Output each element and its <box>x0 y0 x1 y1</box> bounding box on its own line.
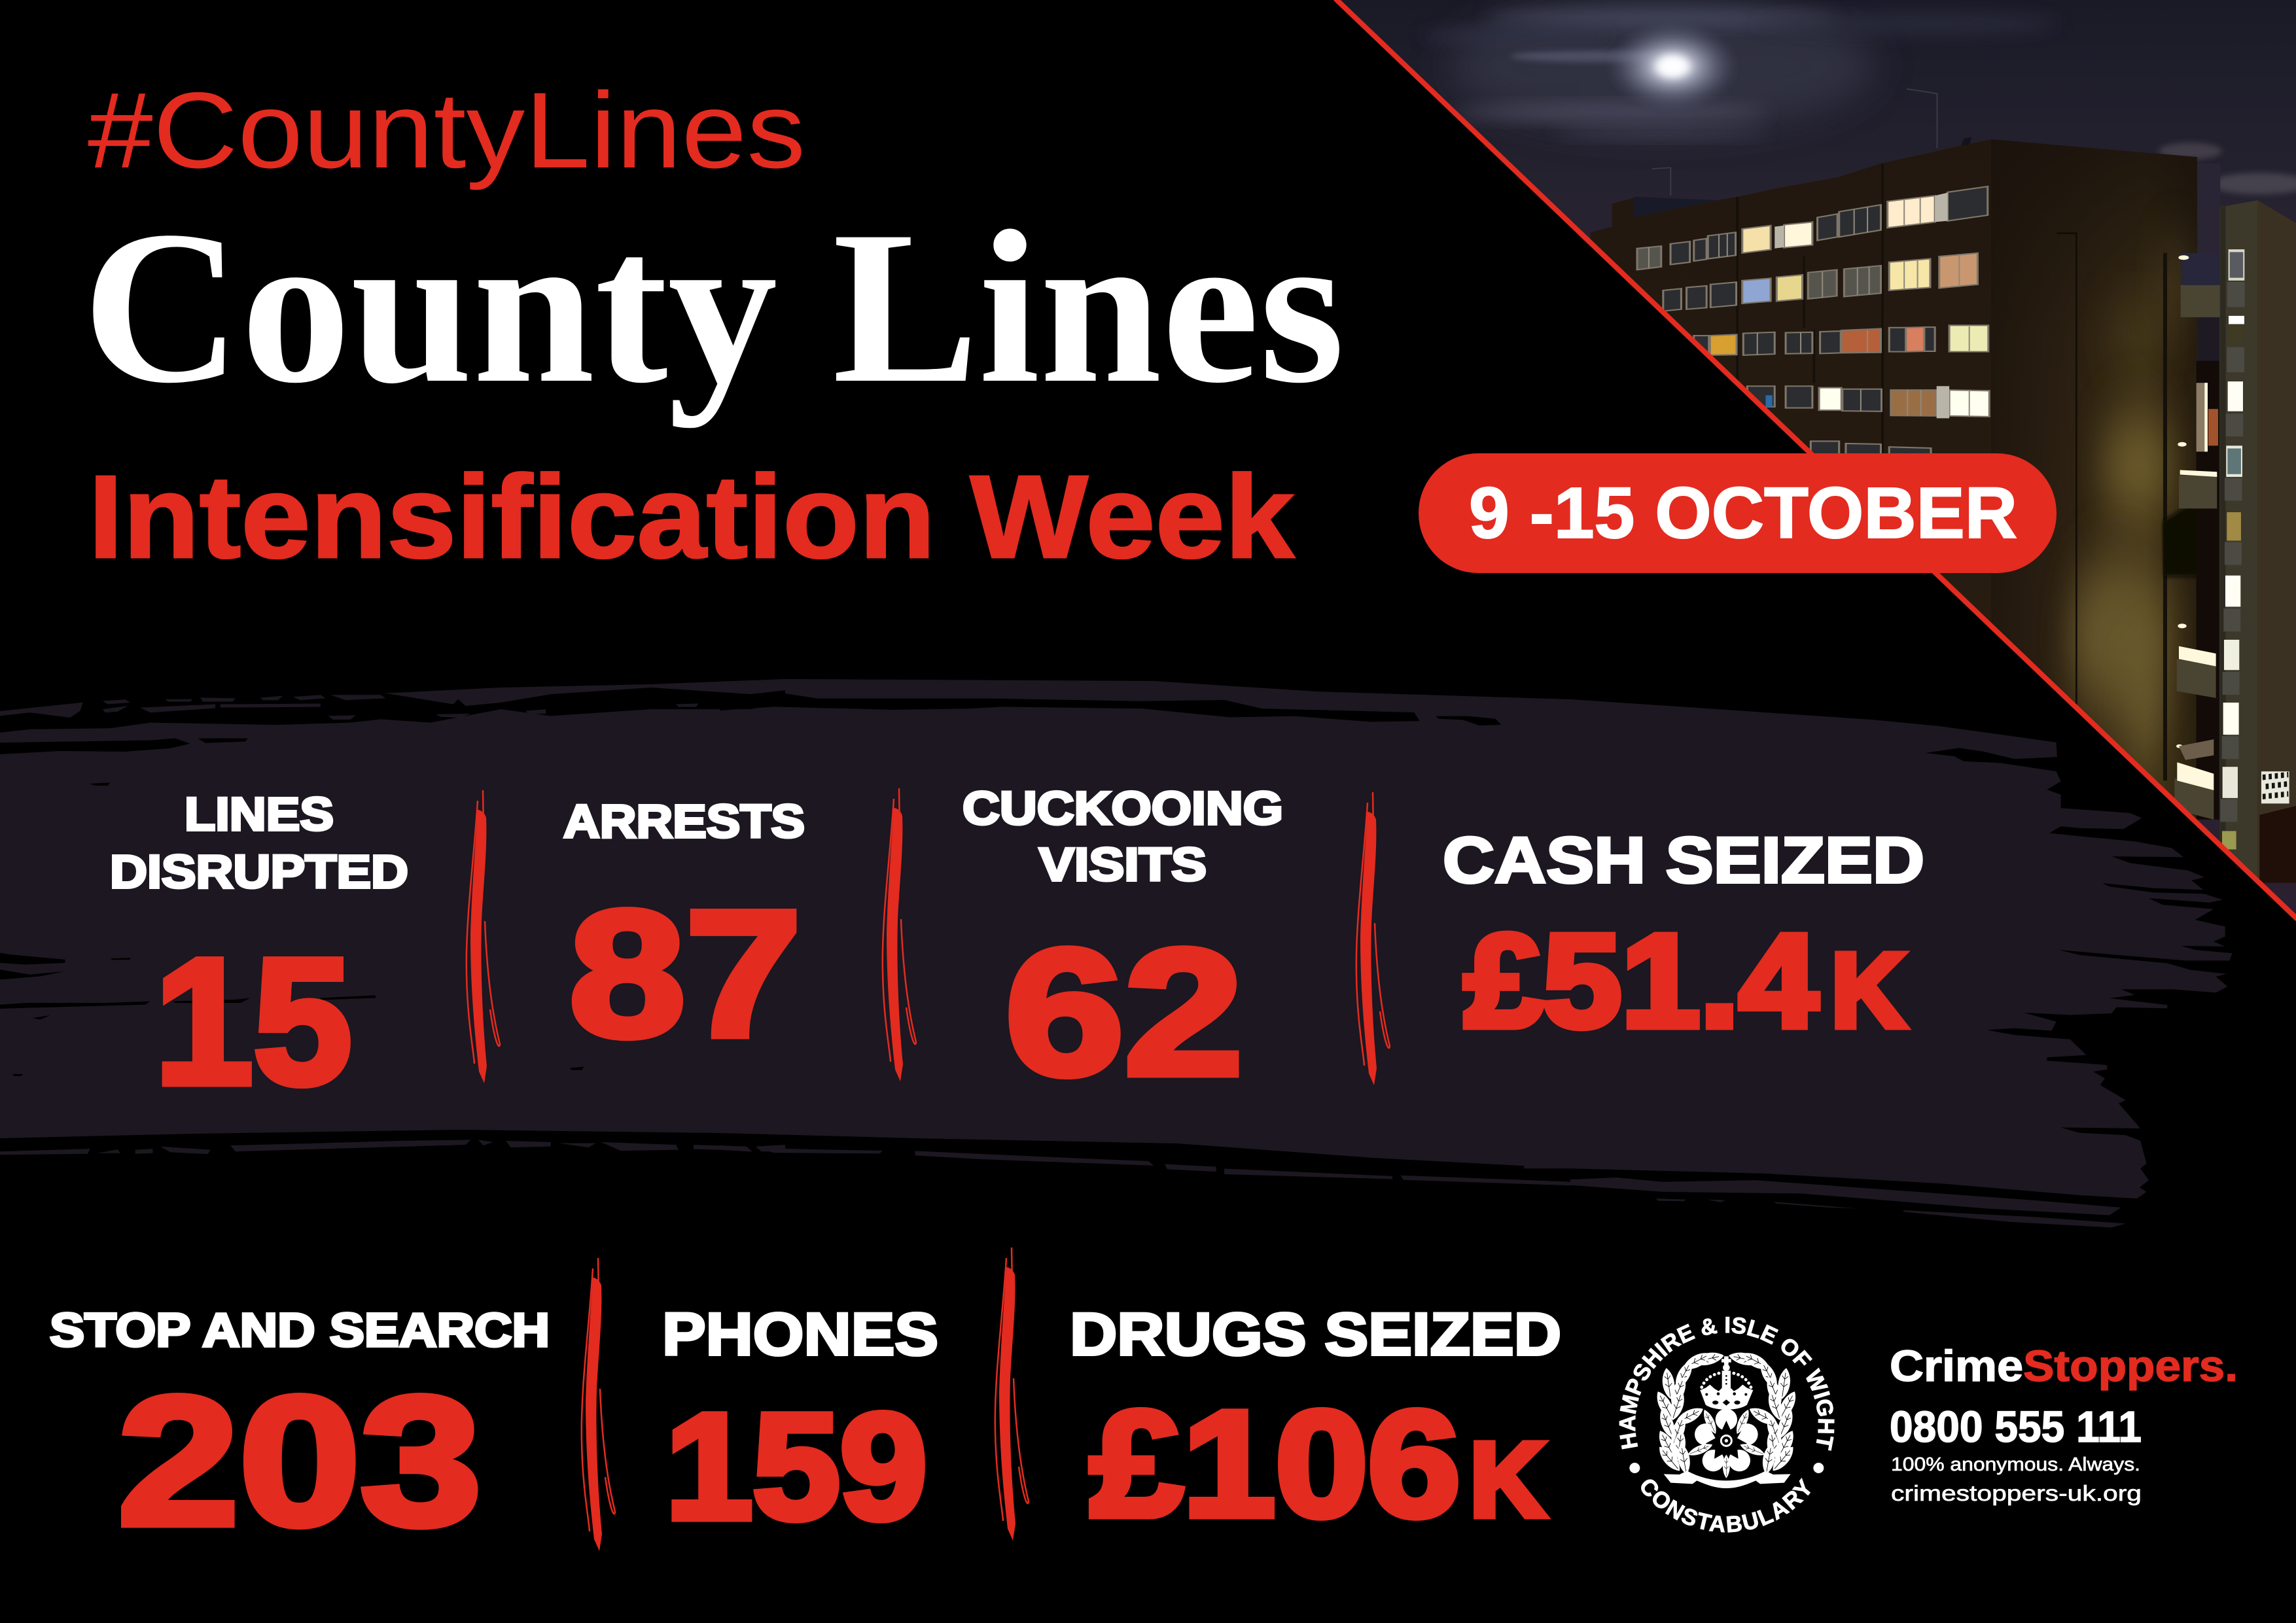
date pill <box>1419 453 2057 573</box>
crimestoppers logo text: Stoppers. <box>2023 1342 2238 1391</box>
moon and clouds <box>1422 1 2296 196</box>
hashtag heading: #CountyLines <box>88 70 805 190</box>
brush lower fringe left <box>0 1140 785 1155</box>
crimestoppers website: crimestoppers-uk.org <box>1891 1481 2142 1505</box>
stat: cuckooing visits: CUCKOOING <box>963 783 1283 835</box>
windows <box>1637 186 1989 456</box>
wreath <box>1653 1348 1800 1475</box>
stat: phones: 159 <box>665 1382 927 1550</box>
date pill: 9 -15 OCTOBER <box>1469 473 2017 553</box>
stat: arrests: 87 <box>569 874 802 1074</box>
stat: stop and search: STOP AND SEARCH <box>50 1304 550 1357</box>
tower block side wall, balconies and second tower <box>1991 139 2296 929</box>
scroll <box>1664 1471 1791 1488</box>
photo: tower block at night with moon <box>1309 0 2296 929</box>
stat: cuckooing visits: VISITS <box>1039 839 1207 891</box>
diagonal red line <box>1335 0 2296 919</box>
crimestoppers logo text: Crime <box>1890 1342 2023 1391</box>
stat: drugs seized: K <box>1470 1421 1545 1538</box>
stat: lines disrupted: DISRUPTED <box>110 846 408 898</box>
brush black streaks <box>0 688 1501 1076</box>
crimestoppers logo text <box>1890 1342 2238 1391</box>
crown <box>1700 1356 1753 1410</box>
crimestoppers tagline: 100% anonymous. Always. <box>1891 1454 2140 1475</box>
brush lower fringe centre <box>720 1145 1570 1185</box>
stat: stop and search <box>50 1304 550 1563</box>
stat: cash seized: £51.4 <box>1464 907 1818 1055</box>
divider scribble 1 <box>467 790 500 1083</box>
crimestoppers phone number: 0800 555 111 <box>1890 1403 2142 1452</box>
divider scribble 3 <box>1356 792 1390 1085</box>
divider scribble 4 <box>582 1258 615 1551</box>
stat: drugs seized <box>1070 1301 1561 1548</box>
brush stroke panel <box>0 679 2232 1228</box>
stat: drugs seized: £106 <box>1090 1380 1460 1548</box>
stat: arrests: ARRESTS <box>563 796 805 848</box>
stat: phones: PHONES <box>662 1301 938 1368</box>
main title: County Lines <box>82 186 1345 428</box>
stat: phones <box>662 1301 938 1550</box>
stat: cash seized: K <box>1831 932 1905 1049</box>
divider scribble 2 <box>883 788 916 1081</box>
crest ring text <box>1619 1316 1835 1533</box>
stat: cuckooing visits: 62 <box>1005 913 1243 1113</box>
stat: lines disrupted <box>110 789 408 1122</box>
stat: cuckooing visits <box>963 783 1283 1113</box>
stat: lines disrupted: LINES <box>185 789 334 841</box>
crest ring text: CONSTABULARY <box>1641 1477 1811 1533</box>
tudor rose <box>1686 1408 1767 1478</box>
stat: stop and search: 203 <box>118 1359 482 1563</box>
stat: cash seized: CASH SEIZED <box>1443 824 1924 896</box>
crest ring text: HAMPSHIRE & ISLE OF WIGHT <box>1619 1316 1835 1451</box>
subtitle: Intensification Week <box>88 451 1295 583</box>
stat: lines disrupted: 15 <box>154 922 352 1122</box>
stat: arrests <box>563 796 805 1074</box>
stat: drugs seized: DRUGS SEIZED <box>1070 1301 1561 1368</box>
stat: cash seized <box>1443 824 1924 1055</box>
police crest <box>1619 1316 1835 1533</box>
brush right end <box>1524 699 2232 1228</box>
tower block front face <box>1590 137 1991 623</box>
divider scribble 5 <box>995 1248 1029 1541</box>
